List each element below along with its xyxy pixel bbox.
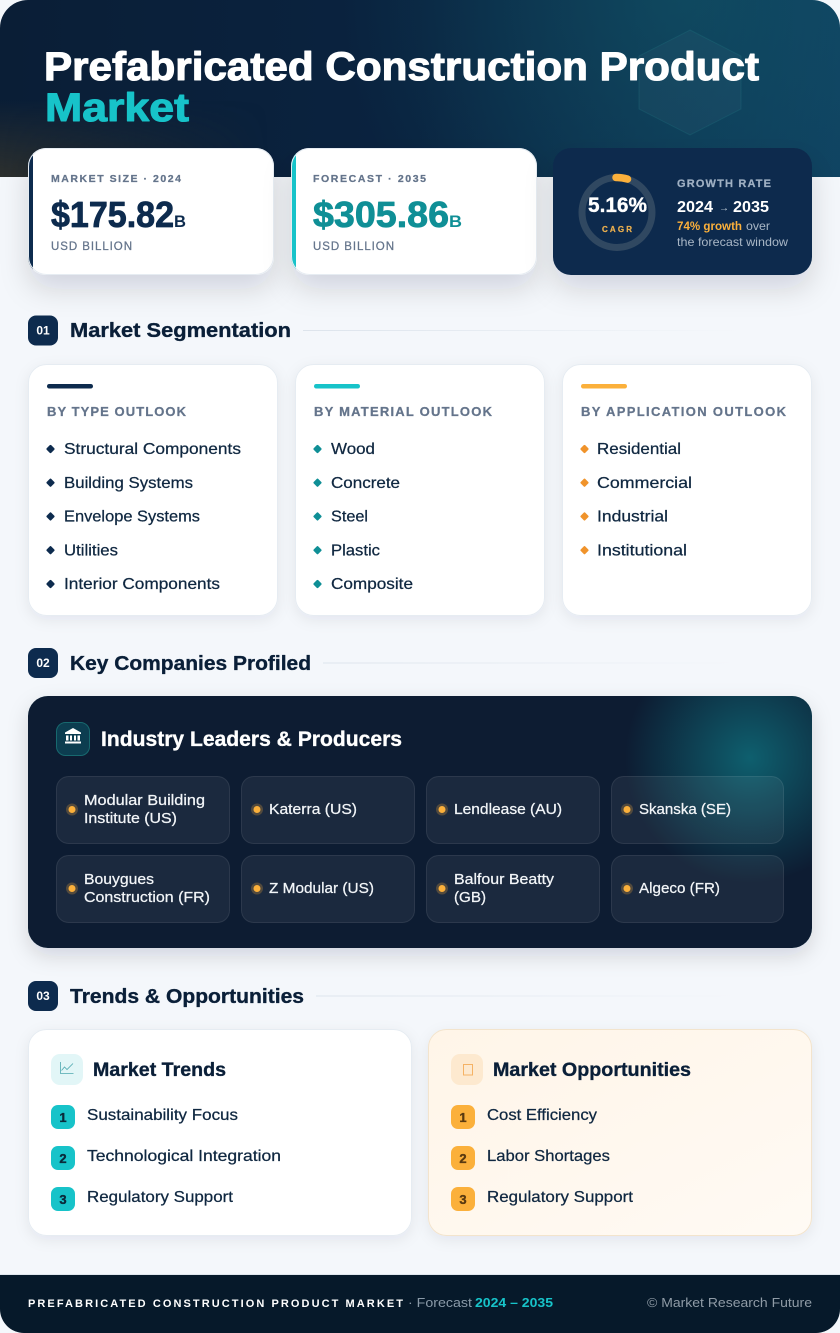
stat card: market size 2024: USD BILLION <box>51 241 132 253</box>
stat card: CAGR growth rate: over <box>746 219 770 233</box>
footer: PREFABRICATED CONSTRUCTION PRODUCT MARKET <box>28 1298 403 1310</box>
company names: Bouygues <box>84 871 154 888</box>
section 02 heading <box>28 648 743 678</box>
panel: by type outlook: Envelope Systems <box>64 508 200 526</box>
panel: by material outlook: Concrete <box>331 475 400 492</box>
section 01 heading: 01 <box>36 324 50 338</box>
panel: market opportunities <box>428 1030 812 1236</box>
company chips <box>56 776 784 922</box>
panel: market trends: 1 <box>59 1110 67 1125</box>
stat card: market size 2024: MARKET SIZE · 2024 <box>51 173 181 185</box>
section 02 heading: Key Companies Profiled <box>70 653 311 675</box>
panel: market opportunities: Labor Shortages <box>487 1148 610 1165</box>
stat card: forecast 2035: B <box>449 212 462 231</box>
CAGR ring <box>582 177 652 248</box>
panel: key companies <box>28 696 812 948</box>
panel: market trends: Sustainability Focus <box>87 1107 238 1124</box>
panel: by material outlook: Plastic <box>331 542 380 560</box>
panel: by type outlook: BY TYPE OUTLOOK <box>47 404 187 419</box>
panel: by type outlook: Building Systems <box>64 475 193 492</box>
hexagon decoration <box>639 30 741 135</box>
panel: by type outlook: Interior Components <box>64 576 220 593</box>
panel: market trends: 2 <box>59 1151 67 1166</box>
stat card: market size 2024: $175.82 <box>51 194 174 235</box>
icon: missing glyph box <box>451 1054 483 1085</box>
CAGR ring: CAGR <box>602 225 632 234</box>
CAGR ring: 5.16% <box>588 194 647 217</box>
chip status dots <box>66 804 633 894</box>
panel: by material outlook: BY MATERIAL OUTLOOK <box>314 404 493 419</box>
panel: market opportunities: 2 <box>459 1151 467 1166</box>
company names: Skanska (SE) <box>639 801 731 818</box>
panel: market trends: Regulatory Support <box>87 1189 234 1206</box>
stat card: CAGR growth rate: the forecast window <box>677 235 788 249</box>
panel: market opportunities: Market Opportunities <box>493 1059 691 1081</box>
stat card: forecast 2035 <box>291 148 537 275</box>
panel: by type outlook <box>28 364 278 616</box>
stat card: CAGR growth rate: 2024 <box>677 199 713 216</box>
footer <box>0 1274 840 1333</box>
panel: by application outlook: BY APPLICATION OUTLOOK <box>581 404 787 419</box>
panel: market opportunities: 1 <box>459 1110 467 1125</box>
stat card: forecast 2035: FORECAST · 2035 <box>313 173 426 185</box>
company names <box>84 792 731 906</box>
title <box>44 45 759 130</box>
stat card: market size 2024: B <box>174 212 186 231</box>
panel: market opportunities: Regulatory Support <box>487 1189 634 1206</box>
header banner <box>0 0 840 177</box>
company names: Katerra (US) <box>269 801 357 818</box>
title: Market <box>45 86 189 130</box>
panel: by material outlook: Composite <box>331 576 413 593</box>
stat card: CAGR growth rate: 74% growth <box>677 219 742 233</box>
panel: by application outlook: Commercial <box>597 475 692 492</box>
stat card: CAGR growth rate <box>553 148 812 275</box>
stat card: forecast 2035: USD BILLION <box>313 241 394 253</box>
panel: key companies: Industry Leaders & Producers <box>101 727 402 751</box>
panel: by application outlook: Industrial <box>597 508 668 526</box>
panel: market opportunities: Cost Efficiency <box>487 1107 597 1124</box>
section 01 heading <box>28 316 743 346</box>
stat card: market size 2024 <box>28 148 274 275</box>
company names: Modular Building <box>84 792 205 809</box>
section 03 heading: 03 <box>36 989 50 1003</box>
section 02 heading: 02 <box>36 656 50 670</box>
panel: by material outlook: Steel <box>331 508 368 526</box>
company names: Z Modular (US) <box>269 880 374 897</box>
stat card: CAGR growth rate: 2035 <box>733 199 769 216</box>
panel: by type outlook: Utilities <box>64 542 118 560</box>
panel: by application outlook: Residential <box>597 441 681 458</box>
icon: line chart <box>51 1054 83 1085</box>
stat card: forecast 2035: $305.86 <box>313 194 449 235</box>
panel: by type outlook: Structural Components <box>64 441 241 458</box>
company names: Institute (US) <box>84 810 177 827</box>
section 03 heading: Trends & Opportunities <box>70 986 304 1008</box>
stat card: CAGR growth rate: → <box>719 203 729 214</box>
icon: institution building <box>56 722 90 756</box>
panel: by application outlook: Institutional <box>597 542 687 560</box>
panel: market opportunities: 3 <box>459 1192 467 1207</box>
footer: © Market Research Future <box>647 1296 812 1310</box>
company names: Lendlease (AU) <box>454 801 562 818</box>
footer: · Forecast <box>408 1296 473 1310</box>
panel: market trends: Technological Integration <box>87 1148 281 1165</box>
panel: market trends: Market Trends <box>93 1059 226 1081</box>
company names: Algeco (FR) <box>639 880 720 897</box>
panel: by material outlook <box>296 364 544 616</box>
section 01 heading: Market Segmentation <box>70 320 291 342</box>
section 03 heading <box>28 981 741 1011</box>
panel: market trends <box>28 1030 412 1236</box>
stat card: CAGR growth rate: GROWTH RATE <box>677 178 771 190</box>
company names: Balfour Beatty <box>454 871 555 888</box>
company names: (GB) <box>454 889 486 906</box>
panel: market trends: 3 <box>59 1192 67 1207</box>
panel: by application outlook <box>562 364 812 616</box>
title: Prefabricated Construction Product <box>44 45 759 89</box>
company names: Construction (FR) <box>84 889 210 906</box>
footer: 2024 – 2035 <box>475 1296 553 1310</box>
panel: by material outlook: Wood <box>331 441 375 458</box>
